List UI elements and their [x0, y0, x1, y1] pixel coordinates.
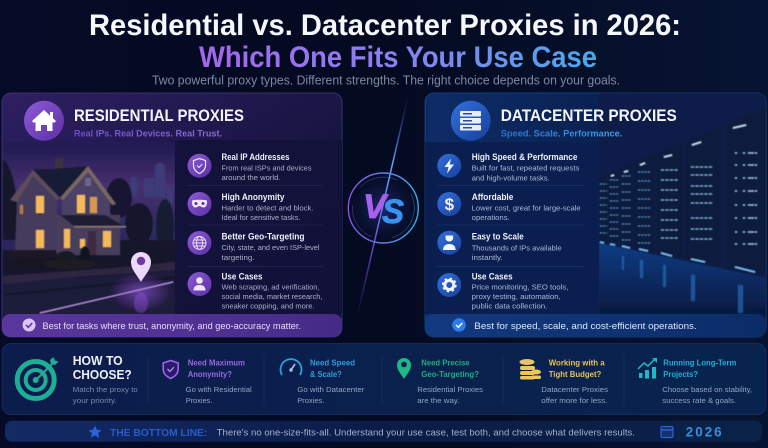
feature: real IP addresses — [188, 152, 312, 182]
feature: easy to scale: Thousands of IPs available — [472, 244, 562, 252]
feature: use cases — [437, 272, 568, 310]
item: long-term projects: Running Long-Term — [663, 358, 736, 368]
feature: high anonymity — [188, 192, 314, 222]
feature: better geo-targeting: City, state, and even ISP-level — [222, 243, 320, 252]
item: maximum anonymity: Need Maximum — [188, 358, 245, 368]
feature: real IP addresses: Real IP Addresses — [222, 152, 290, 162]
feature: use cases: Use Cases — [222, 272, 262, 282]
feature: easy to scale: Easy to Scale — [472, 232, 524, 242]
feature: better geo-targeting — [188, 231, 320, 262]
illustration: server racks — [599, 93, 766, 314]
feature: real IP addresses: around the world. — [222, 173, 280, 182]
callout: residential best for: Best for tasks where trust, anonymity, and geo-accuracy matter. — [42, 321, 301, 331]
feature: affordable: operations. — [472, 213, 510, 222]
VS emblem — [338, 97, 428, 317]
illustration: house at night with location pin — [3, 142, 175, 314]
item: geo-targeting: are the way. — [417, 396, 459, 405]
feature: affordable: Lower cost, great for large-scale — [472, 204, 581, 212]
title: Residential vs. Datacenter Proxies in 2026: — [89, 9, 681, 42]
item: geo-targeting — [397, 358, 483, 405]
feature: use cases — [188, 272, 322, 310]
item: speed and scale: Proxies. — [297, 396, 324, 405]
block: how to choose heading: your priority. — [73, 396, 117, 405]
item: tight budget: Tight Budget? — [549, 370, 601, 379]
item: maximum anonymity: Proxies. — [186, 396, 212, 405]
title — [89, 9, 681, 74]
item: speed and scale: & Scale? — [310, 370, 342, 379]
block: how to choose heading: HOW TO — [73, 354, 123, 368]
heading: residential proxies: RESIDENTIAL PROXIES — [74, 106, 244, 125]
text: year: 2026 — [686, 424, 722, 440]
icon: target with arrow — [17, 357, 58, 398]
feature: high speed and performance: High Speed & Performance — [472, 152, 577, 162]
feature: use cases: public data collection. — [472, 302, 547, 310]
feature: affordable: $ — [445, 195, 455, 214]
feature: high anonymity: Ideal for sensitive tasks. — [222, 213, 300, 222]
feature: affordable: Affordable — [472, 192, 513, 202]
item: geo-targeting: Residential Proxies — [417, 385, 483, 394]
icon: server badge — [451, 101, 491, 141]
item: speed and scale: Need Speed — [310, 358, 355, 368]
feature: high speed and performance: and high-volume tasks. — [472, 174, 550, 182]
VS emblem: V — [363, 188, 389, 226]
title: Which One Fits Your Use Case — [199, 41, 597, 74]
feature: high speed and performance: Built for fast, repeated requests — [472, 164, 580, 172]
item: maximum anonymity: Go with Residential — [186, 385, 252, 394]
panel: residential proxies — [2, 93, 342, 337]
panel: datacenter proxies — [425, 93, 766, 337]
feature: high anonymity: Harder to detect and block. — [222, 204, 314, 212]
callout: residential best for — [2, 314, 342, 337]
item: maximum anonymity — [163, 358, 252, 405]
feature: affordable — [437, 192, 581, 222]
feature: easy to scale: instantly. — [472, 253, 503, 262]
feature: better geo-targeting: Better Geo-Targeting — [222, 232, 304, 242]
feature: use cases: social media, market research, — [222, 292, 322, 301]
item: speed and scale: Go with Datacenter — [297, 385, 365, 394]
item: long-term projects — [638, 358, 752, 405]
item: tight budget: Working with a — [549, 358, 605, 368]
feature list panel — [175, 140, 342, 314]
tagline: residential: Real IPs. Real Devices. Real Trust. — [74, 128, 222, 140]
item: geo-targeting: Geo-Targeting? — [421, 370, 479, 379]
feature: high speed and performance — [437, 152, 580, 182]
item: tight budget: Datacenter Proxies — [541, 385, 608, 394]
feature: better geo-targeting: targeting. — [222, 253, 254, 262]
block: how to choose heading — [73, 354, 138, 405]
item: geo-targeting: Need Precise — [421, 358, 470, 368]
callout: datacenter best for: Best for speed, scale, and cost-efficient operations. — [474, 321, 697, 331]
text: bottom line message: There's no one-size-fits-all. Understand your use case, test both, and choose what delivers results. — [217, 428, 635, 438]
item: long-term projects: Choose based on stability, — [662, 385, 752, 394]
callout: datacenter best for — [425, 314, 766, 337]
feature: use cases: proxy testing, automation, — [472, 292, 561, 301]
block: how to choose heading: Match the proxy to — [73, 385, 138, 394]
block: how to choose heading: CHOOSE? — [73, 368, 132, 382]
heading: datacenter proxies: DATACENTER PROXIES — [501, 106, 677, 125]
feature: easy to scale — [437, 231, 562, 262]
icon: location pin — [131, 252, 151, 282]
icon: calendar — [661, 426, 673, 438]
icon: house badge — [24, 101, 64, 141]
feature list panel — [425, 142, 599, 314]
subtitle: Two powerful proxy types. Different strengths. The right choice depends on your goals. — [152, 74, 620, 88]
item: long-term projects: success rate & goals. — [662, 396, 736, 405]
feature: high anonymity: High Anonymity — [222, 192, 284, 202]
item: maximum anonymity: Anonymity? — [188, 370, 232, 379]
feature: use cases: Price monitoring, SEO tools, — [472, 282, 568, 292]
banner: the bottom line — [5, 421, 762, 442]
icon: star — [88, 426, 102, 438]
item: tight budget: offer more for less. — [541, 396, 607, 405]
item: tight budget — [520, 358, 608, 405]
item: long-term projects: Projects? — [663, 370, 698, 379]
feature: real IP addresses: From real ISPs and devices — [222, 164, 312, 172]
text: bottom line label: THE BOTTOM LINE: — [110, 427, 207, 439]
feature: use cases: Web scraping, ad verification, — [222, 282, 320, 292]
feature: use cases: sneaker copping, and more. — [222, 302, 314, 310]
item: speed and scale — [280, 358, 365, 405]
tagline: datacenter: Speed. Scale. Performance. — [501, 128, 622, 140]
panel: how to choose — [2, 344, 766, 414]
VS emblem: S — [382, 193, 404, 231]
feature: use cases: Use Cases — [472, 272, 513, 282]
